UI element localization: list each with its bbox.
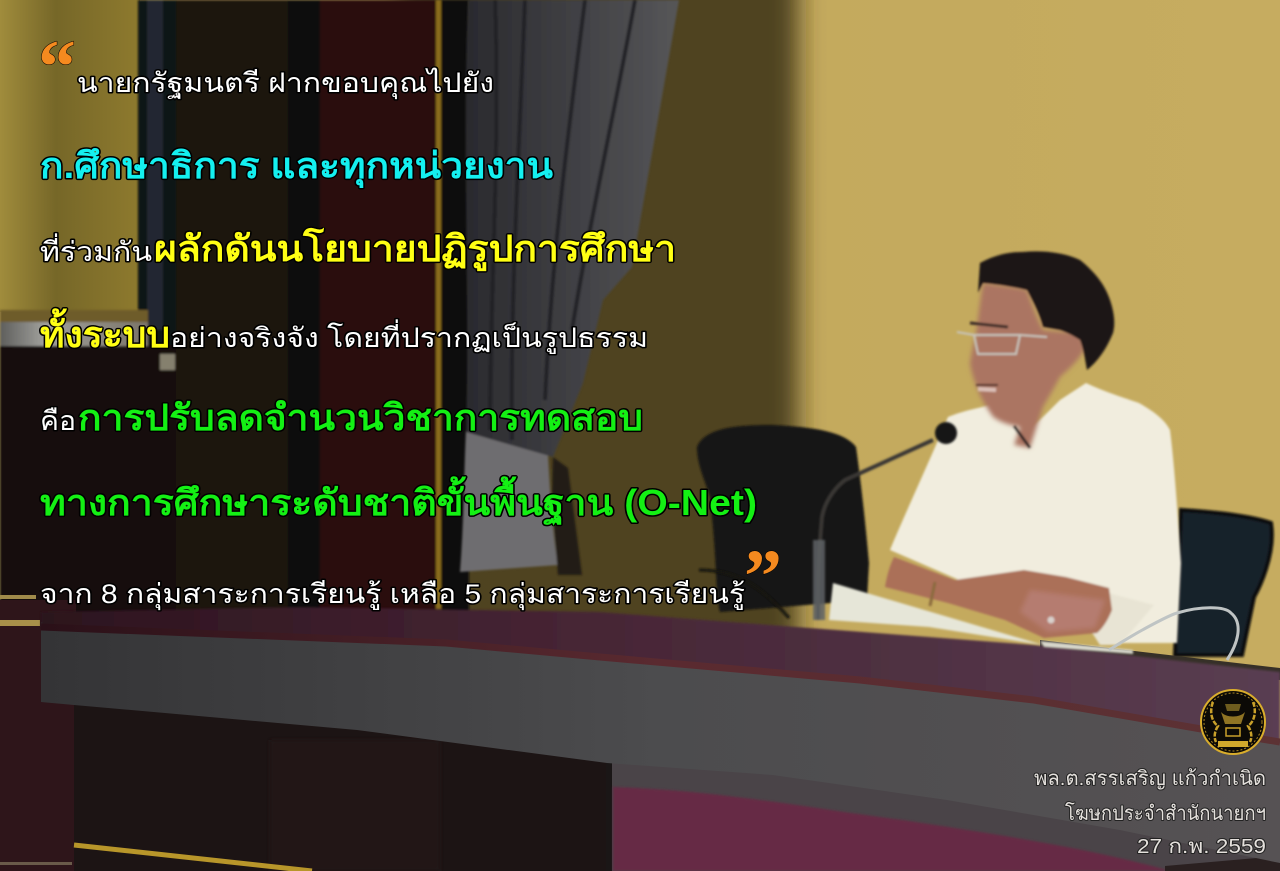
gold trim — [74, 845, 312, 871]
upper curtain — [466, 0, 679, 457]
desk lip — [41, 627, 1280, 742]
hair — [978, 251, 1114, 370]
icon: government emblem — [1201, 690, 1265, 754]
spokesperson title: โฆษกประจำสำนักนายกฯ — [1065, 802, 1266, 825]
line 4 — [40, 308, 648, 355]
papers on desk — [829, 583, 1133, 654]
curtain tie — [552, 457, 582, 575]
curtain — [460, 0, 679, 575]
ring — [1048, 616, 1054, 624]
spokesperson name: พล.ต.สรรเสริญ แก้วกำเนิด — [1034, 768, 1266, 790]
line 7: จาก 8 กลุ่มสาระการเรียนรู้ เหลือ 5 กลุ่มสาระการเรียนรู้ — [40, 579, 745, 611]
microphone — [699, 422, 957, 620]
dark front panel — [74, 700, 610, 871]
line 5: คือ — [40, 406, 76, 436]
chair: right — [1175, 510, 1272, 655]
dark corner — [1165, 856, 1280, 871]
lower right recess — [606, 755, 1280, 871]
door frame and dark panels — [0, 0, 469, 640]
line 4: อย่างจริงจัง โดยที่ปรากฏเป็นรูปธรรม — [170, 319, 648, 354]
gray fascia — [41, 622, 1280, 863]
lower curtain — [460, 430, 558, 572]
purple desk top — [41, 607, 1280, 742]
gold stripes — [0, 595, 36, 599]
line 6: ทางการศึกษาระดับชาติขั้นพื้นฐาน (O-Net) — [40, 476, 757, 526]
glasses — [957, 332, 1047, 354]
dark vignette overlay on wall — [400, 0, 798, 650]
face and neck — [970, 283, 1084, 448]
eyebrow — [970, 323, 1008, 327]
line 4: ทั้งระบบ — [40, 308, 170, 355]
line 3: ที่ร่วมกัน — [40, 233, 152, 267]
quote mark: opening: “ — [38, 25, 76, 109]
quote text — [40, 68, 757, 611]
chair: left — [697, 425, 869, 612]
left column — [0, 600, 76, 871]
signature block — [1034, 768, 1266, 858]
man — [885, 251, 1181, 645]
line 1: นายกรัฐมนตรี ฝากขอบคุณไปยัง — [77, 68, 494, 100]
line 2: ก.ศึกษาธิการ และทุกหน่วยงาน — [40, 145, 553, 189]
desk surface behind top — [1040, 640, 1280, 680]
forearms and hands — [885, 557, 1112, 638]
desk — [0, 595, 1280, 871]
shirt — [890, 383, 1181, 643]
cable — [1109, 608, 1238, 660]
date: 27 ก.พ. 2559 — [1137, 836, 1266, 858]
purple front panel — [613, 787, 1170, 871]
left wall section — [0, 0, 140, 312]
collar opening — [1014, 426, 1030, 448]
quote mark: closing: ” — [744, 535, 782, 619]
line 3 — [40, 227, 676, 272]
line 5: การปรับลดจำนวนวิชาการทดสอบ — [78, 397, 643, 438]
line 3: ผลักดันนโยบายปฏิรูปการศึกษา — [154, 227, 676, 272]
mouth — [978, 389, 996, 390]
bracelet — [930, 582, 935, 606]
